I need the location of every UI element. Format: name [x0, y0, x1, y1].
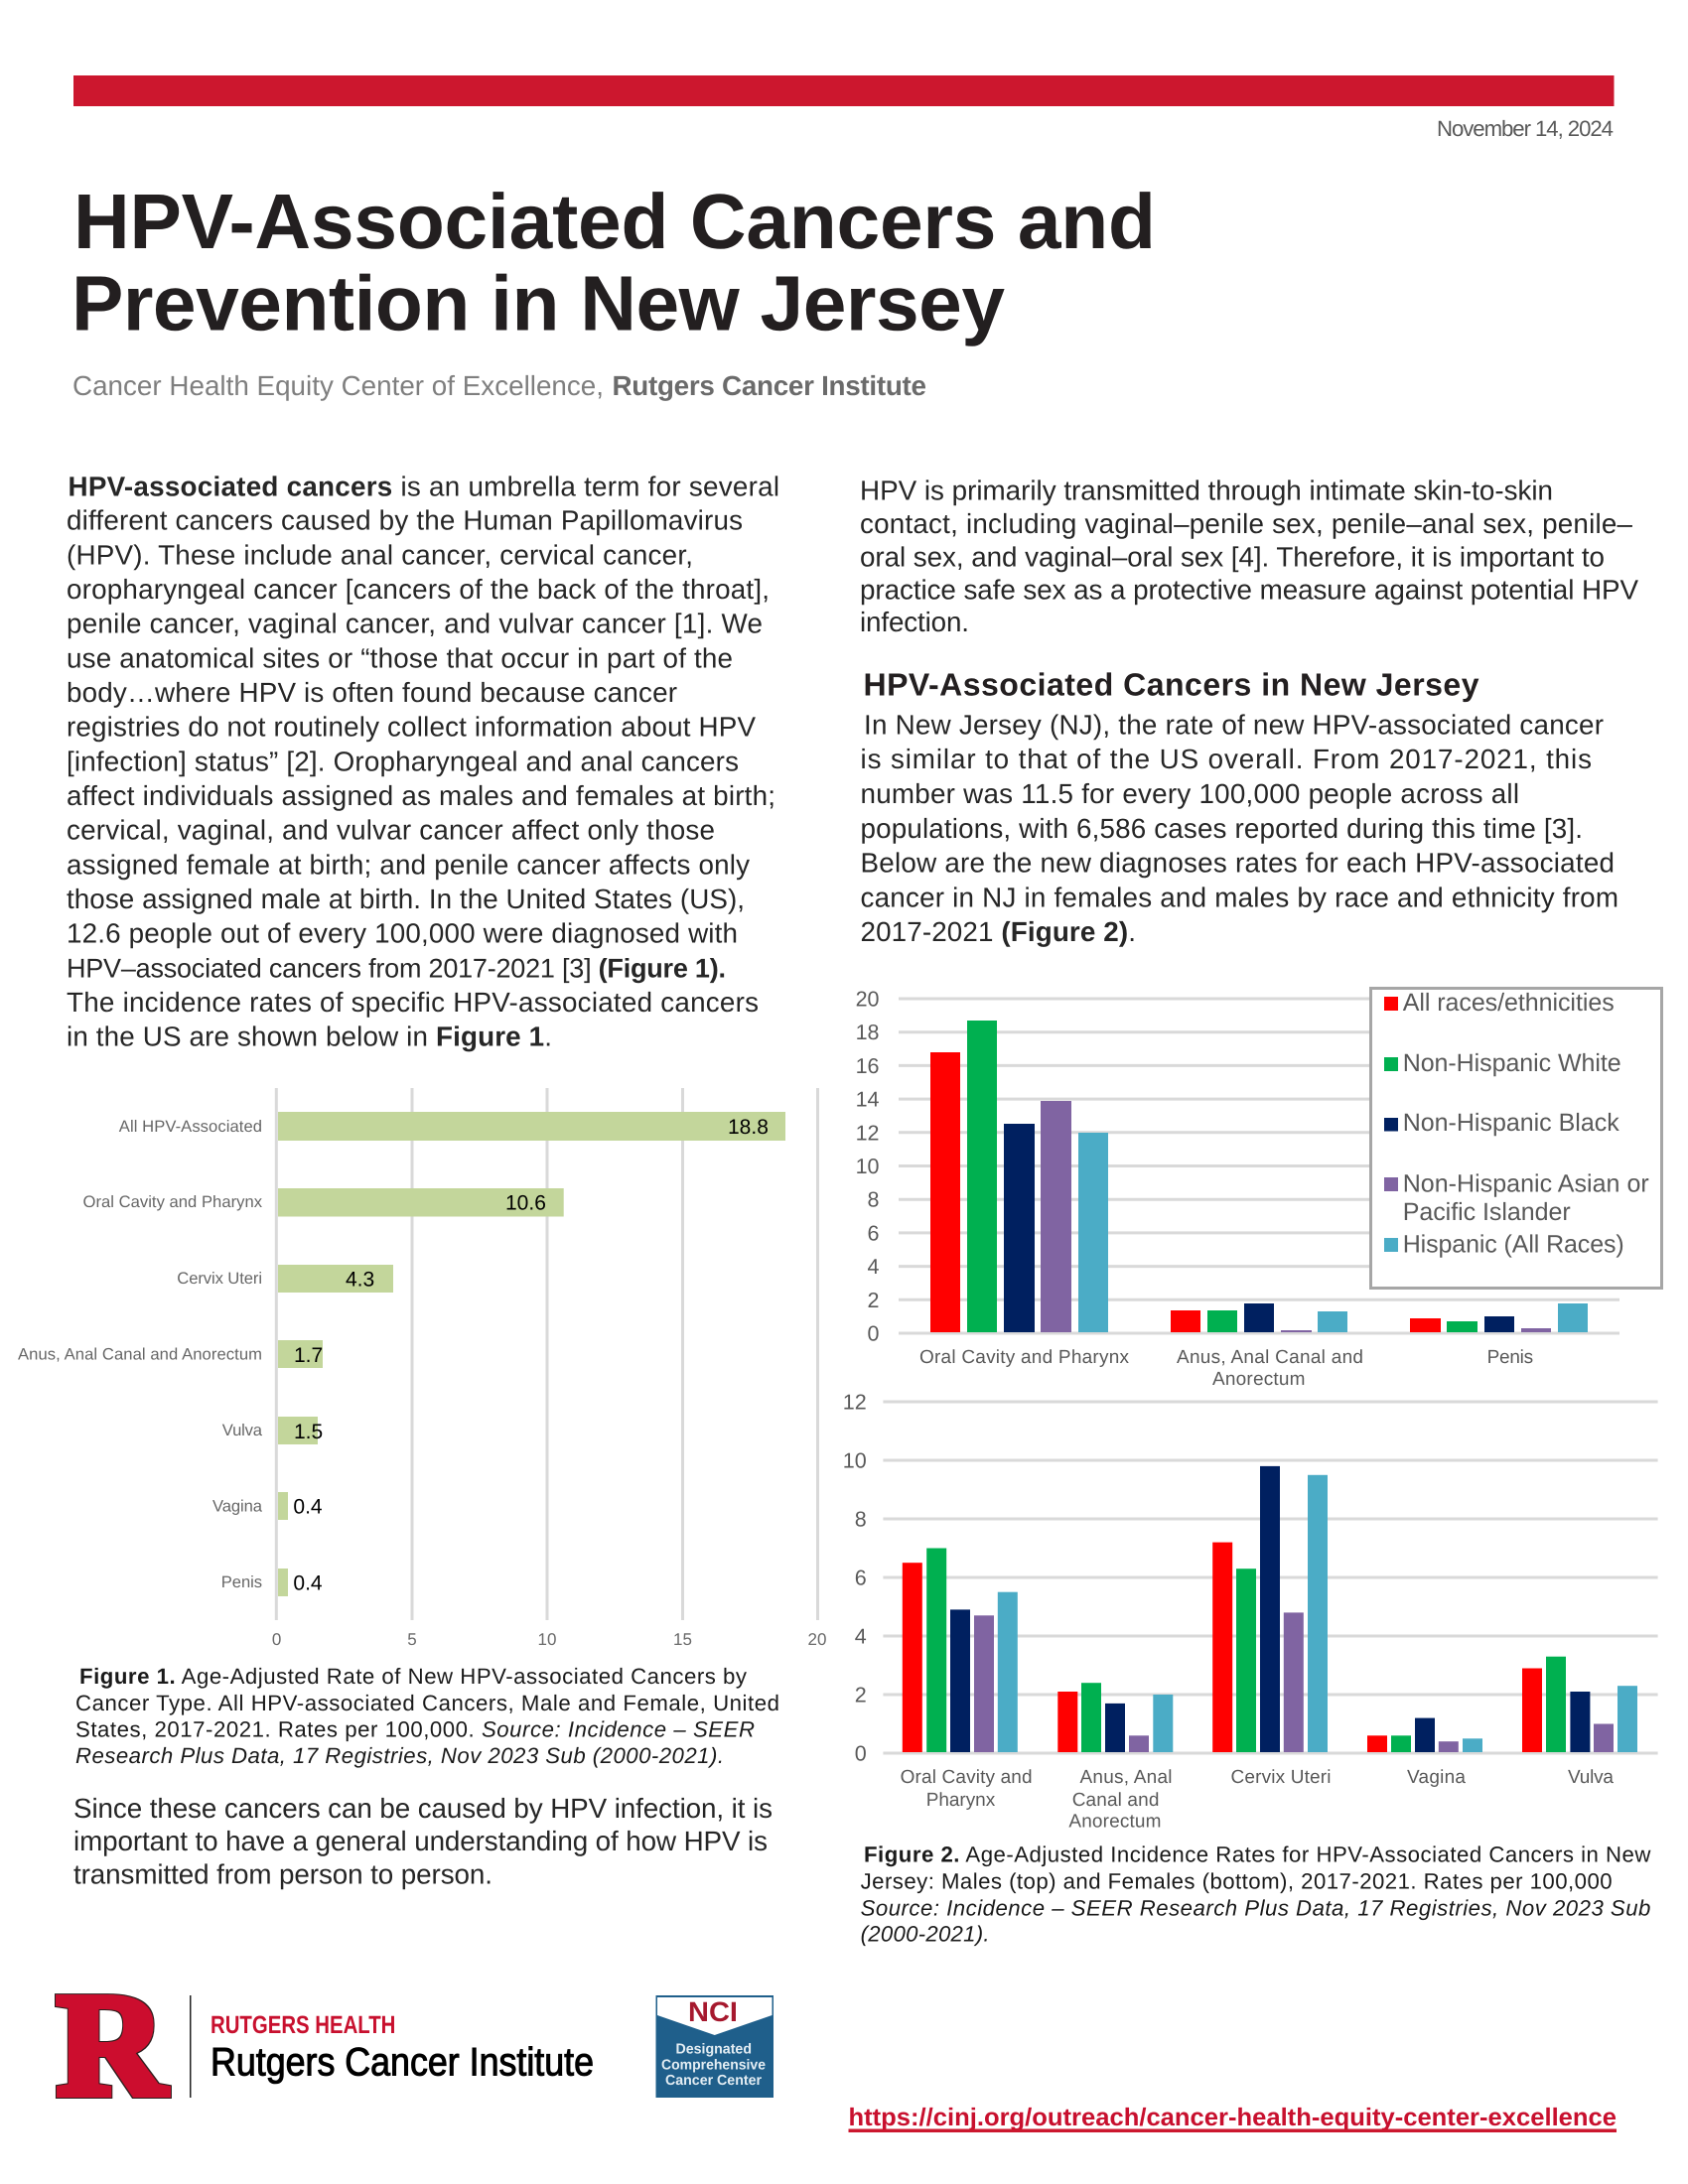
y axis labels: males: 12 — [856, 1121, 880, 1145]
logo wordmark: Rutgers Health: RUTGERS HEALTH — [211, 2011, 395, 2039]
text block: introduction: 12.6 people out of every 100,000 were diagnosed with — [67, 918, 738, 949]
text block: transmission: oral sex, and vaginal–oral sex [4]. Therefore, it is important to — [860, 541, 1605, 572]
heading: New Jersey section: HPV-Associated Cancers in New Jersey — [864, 667, 1479, 703]
x axis labels: females: Anorectum — [1068, 1812, 1161, 1833]
x axis labels: males: Oral Cavity and Pharynx — [919, 1347, 1130, 1368]
text block: New Jersey rates — [860, 709, 1618, 947]
value labels: figure 1 — [293, 1116, 769, 1594]
y axis labels: males: 14 — [856, 1088, 880, 1112]
value labels: figure 1: 0.4 — [293, 1572, 323, 1594]
text block: transmission lead-in — [73, 1793, 773, 1890]
caption: figure 2: Jersey: Males (top) and Females (bottom), 2017-2021. Rates per 100,000 — [861, 1868, 1613, 1893]
text block: introduction: body…where HPV is often found because cancer — [67, 677, 677, 708]
x axis labels: males — [919, 1347, 1533, 1390]
subtitle: Rutgers Cancer Institute — [612, 370, 926, 401]
text block: introduction: affect individuals assigned as males and females at birth; — [67, 780, 775, 811]
bars: females vagina — [1367, 1718, 1482, 1752]
caption: figure 1: Figure 1. Age-Adjusted Rate of New HPV-associated Cancers by — [79, 1664, 748, 1689]
text block: New Jersey rates: In New Jersey (NJ), the rate of new HPV-associated cancer — [864, 709, 1604, 740]
caption: figure 2: Source: Incidence – SEER Research Plus Data, 17 Registries, Nov 2023 Sub — [861, 1895, 1650, 1920]
subtitle — [72, 370, 926, 401]
legend item: hispanic: Hispanic (All Races) — [1403, 1231, 1624, 1259]
subtitle: Cancer Health Equity Center of Excellence, — [72, 370, 604, 401]
bars: females oral cavity and pharynx — [903, 1549, 1018, 1752]
legend item: asian or pacific islander: Non-Hispanic Asian or — [1403, 1170, 1649, 1198]
category labels: figure 1: Anus, Anal Canal and Anorectum — [18, 1344, 262, 1364]
category labels: figure 1: All HPV-Associated — [119, 1117, 262, 1136]
y axis labels: males — [856, 987, 880, 1346]
y axis labels: males: 4 — [868, 1255, 880, 1279]
text block: introduction: oropharyngeal cancer [cancers of the back of the throat], — [67, 574, 770, 605]
category labels: figure 1: Penis — [221, 1572, 262, 1591]
text block: introduction: in the US are shown below in Figure 1. — [67, 1022, 552, 1052]
date: November 14, 2024 — [1437, 116, 1614, 141]
text block: introduction: cervical, vaginal, and vulvar cancer affect only those — [67, 815, 715, 846]
y axis labels: females: 10 — [843, 1449, 867, 1473]
y axis labels: males: 20 — [856, 987, 880, 1011]
text block: New Jersey rates: is similar to that of the US overall. From 2017-2021, this — [860, 744, 1592, 774]
y axis labels: females: 8 — [855, 1507, 867, 1531]
link: center website: https://cinj.org/outreach/cancer-health-equity-center-excellence — [848, 2104, 1617, 2131]
bars: males anus — [1171, 1303, 1347, 1332]
text block: introduction: assigned female at birth; and penile cancer affects only — [67, 849, 750, 880]
text block: New Jersey rates: 2017-2021 (Figure 2). — [860, 916, 1136, 947]
y axis labels: males: 16 — [856, 1054, 880, 1078]
y axis labels: males: 8 — [868, 1188, 880, 1212]
axis labels: figure 1: 15 — [673, 1630, 692, 1649]
bars: figure 1 — [278, 1112, 785, 1596]
x axis labels: males: Penis — [1487, 1347, 1533, 1368]
caption: figure 1 — [75, 1664, 779, 1768]
text block: introduction: HPV-associated cancers is an umbrella term for several — [68, 471, 779, 502]
title: HPV-Associated Cancers and — [73, 178, 1156, 265]
text block: introduction: (HPV). These include anal cancer, cervical cancer, — [67, 539, 693, 570]
caption: figure 1: Research Plus Data, 17 Registries, Nov 2023 Sub (2000-2021). — [75, 1743, 724, 1768]
value labels: figure 1: 1.7 — [294, 1344, 323, 1367]
axis labels: figure 1: 20 — [808, 1630, 826, 1649]
text block: transmission: contact, including vaginal–penile sex, penile–anal sex, penile– — [860, 508, 1633, 539]
y axis labels: males: 2 — [868, 1289, 880, 1312]
text block: transmission lead-in: Since these cancers can be caused by HPV infection, it is — [73, 1793, 773, 1824]
caption: figure 2: (2000-2021). — [861, 1922, 990, 1947]
axis labels: figure 1: 5 — [407, 1630, 417, 1649]
x axis labels: females: Oral Cavity and — [901, 1767, 1033, 1788]
text block: introduction: [infection] status” [2]. Oropharyngeal and anal cancers — [67, 746, 739, 776]
text block: introduction: penile cancer, vaginal cancer, and vulvar cancer [1]. We — [67, 609, 763, 639]
logo divider — [190, 1995, 191, 2098]
bars: females vulva — [1522, 1657, 1637, 1752]
header bar — [73, 75, 1615, 106]
text block: transmission: infection. — [860, 607, 969, 637]
text block: introduction: those assigned male at birth. In the United States (US), — [67, 884, 745, 914]
axis labels: figure 1 — [272, 1630, 826, 1649]
legend item: asian or pacific islander: Pacific Islander — [1403, 1198, 1571, 1226]
value labels: figure 1: 1.5 — [294, 1421, 323, 1443]
y axis labels: females: 6 — [855, 1567, 867, 1590]
x axis labels: females: Cervix Uteri — [1231, 1767, 1331, 1788]
badge: NCI designated comprehensive cancer center: Comprehensive — [661, 2057, 766, 2073]
text block: introduction: HPV–associated cancers from 2017-2021 [3] (Figure 1). — [67, 953, 726, 983]
value labels: figure 1: 18.8 — [728, 1116, 769, 1139]
caption: figure 1: Cancer Type. All HPV-associated Cancers, Male and Female, United — [75, 1691, 779, 1715]
value labels: figure 1: 10.6 — [505, 1191, 546, 1215]
text block: introduction: The incidence rates of specific HPV-associated cancers — [67, 987, 759, 1018]
y axis labels: males: 6 — [868, 1221, 880, 1245]
text block: New Jersey rates: cancer in NJ in females and males by race and ethnicity from — [860, 882, 1618, 912]
text block: transmission lead-in: important to have a general understanding of how HPV is — [73, 1826, 768, 1856]
x axis labels: females: Anus, Anal — [1080, 1767, 1172, 1788]
value labels: figure 1: 4.3 — [346, 1269, 374, 1292]
caption: figure 2: Figure 2. Age-Adjusted Incidence Rates for HPV-Associated Cancers in New — [864, 1843, 1651, 1867]
text block: introduction: registries do not routinely collect information about HPV — [67, 712, 756, 743]
x axis labels: males: Anus, Anal Canal and — [1177, 1347, 1363, 1368]
legend — [1370, 989, 1662, 1289]
category labels: figure 1: Vulva — [222, 1421, 263, 1439]
y axis labels: females: 12 — [843, 1390, 867, 1414]
logo: Rutgers Cancer Institute — [57, 1964, 594, 2126]
text block: New Jersey rates: number was 11.5 for every 100,000 people across all — [860, 778, 1519, 809]
y axis labels: females: 2 — [855, 1684, 867, 1707]
x axis labels: females: Vulva — [1568, 1767, 1614, 1788]
category labels: figure 1: Vagina — [212, 1497, 263, 1515]
text block: transmission: practice safe sex as a protective measure against potential HPV — [860, 575, 1638, 606]
bar chart: figure 1 — [18, 1088, 826, 1649]
caption: figure 2 — [861, 1843, 1651, 1947]
legend item: all races: All races/ethnicities — [1403, 989, 1615, 1017]
x axis labels: males: Anorectum — [1212, 1369, 1305, 1390]
text block: introduction: use anatomical sites or “those that occur in part of the — [67, 642, 733, 673]
x axis labels: females: Pharynx — [926, 1790, 996, 1811]
badge: NCI designated comprehensive cancer center: Designated — [675, 2041, 752, 2057]
y axis labels: females: 4 — [855, 1624, 867, 1648]
text block: transmission lead-in: transmitted from person to person. — [73, 1858, 492, 1890]
bars: males penis — [1410, 1303, 1588, 1332]
text block: transmission — [860, 475, 1638, 637]
caption: figure 1: States, 2017-2021. Rates per 100,000. Source: Incidence – SEER — [75, 1717, 755, 1741]
text block: New Jersey rates: Below are the new diagnoses rates for each HPV-associated — [860, 848, 1615, 879]
icon: Rutgers R: R — [57, 1964, 168, 2126]
logo wordmark: Rutgers Cancer Institute: Rutgers Cancer Institute — [211, 2041, 594, 2085]
title: Prevention in New Jersey — [71, 260, 1005, 347]
y axis labels: males: 0 — [868, 1322, 880, 1346]
y axis labels: males: 18 — [856, 1021, 880, 1044]
axis labels: figure 1: 10 — [538, 1630, 556, 1649]
legend item: asian or pacific islander — [1384, 1170, 1649, 1226]
legend item: white: Non-Hispanic White — [1403, 1049, 1621, 1077]
y axis labels: males: 10 — [856, 1155, 880, 1178]
legend item: black: Non-Hispanic Black — [1403, 1109, 1619, 1137]
bars: males oral cavity and pharynx — [930, 1021, 1108, 1332]
y axis labels: females: 0 — [855, 1741, 867, 1765]
text block: introduction: different cancers caused by the Human Papillomavirus — [67, 505, 743, 536]
badge: NCI designated comprehensive cancer center — [655, 1995, 774, 2098]
text block: transmission: HPV is primarily transmitted through intimate skin-to-skin — [860, 475, 1553, 506]
category labels: figure 1 — [18, 1117, 263, 1591]
value labels: figure 1: 0.4 — [293, 1495, 323, 1518]
x axis labels: females: Vagina — [1407, 1767, 1466, 1788]
x axis labels: females — [901, 1767, 1614, 1833]
bars: females anus — [1057, 1683, 1173, 1752]
category labels: figure 1: Oral Cavity and Pharynx — [83, 1192, 263, 1211]
title — [71, 178, 1156, 347]
y axis labels: females — [843, 1390, 867, 1765]
bars: females cervix uteri — [1212, 1466, 1328, 1752]
category labels: figure 1: Cervix Uteri — [177, 1269, 262, 1288]
bar chart: figure 2 females — [843, 1390, 1658, 1833]
x axis labels: females: Canal and — [1072, 1790, 1159, 1811]
text block: New Jersey rates: populations, with 6,586 cases reported during this time [3]. — [860, 813, 1583, 844]
bar chart: figure 2 males — [856, 987, 1619, 1390]
badge: NCI designated comprehensive cancer center: Cancer Center — [665, 2073, 762, 2089]
axis labels: figure 1: 0 — [272, 1630, 281, 1649]
badge: NCI designated comprehensive cancer center: NCI — [688, 1996, 738, 2027]
text block: introduction — [67, 471, 779, 1052]
